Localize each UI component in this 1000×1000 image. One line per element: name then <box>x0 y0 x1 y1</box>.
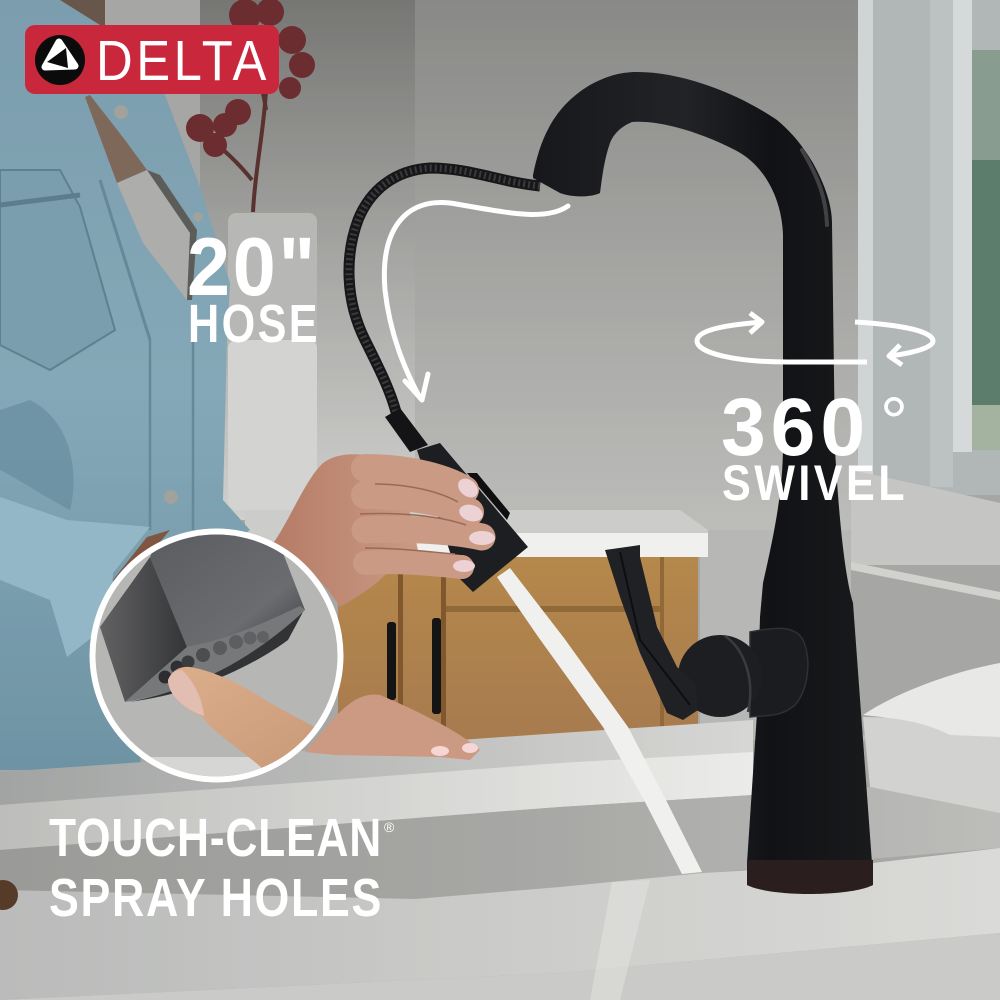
collar shadow <box>60 0 105 25</box>
wood cabinets <box>338 557 698 742</box>
logo: Delta red badge <box>25 25 279 94</box>
person in denim shirt <box>0 0 250 770</box>
label: touch-clean spray holes <box>49 808 395 928</box>
vase and red branches <box>186 0 317 510</box>
faucet: spout and body <box>533 72 873 894</box>
holding hand <box>272 454 495 607</box>
label: touch-clean spray holes: TOUCH-CLEAN <box>49 808 382 868</box>
label: 20 inch hose: HOSE <box>188 294 320 354</box>
back counter <box>245 510 708 557</box>
arrow: swivel rotation <box>697 313 933 365</box>
shirt pocket <box>0 170 115 370</box>
label: 360 degree swivel <box>721 382 908 511</box>
label: touch-clean spray holes: SPRAY HOLES <box>49 868 383 928</box>
main counter and sink <box>0 663 1000 1000</box>
button placket <box>150 340 193 530</box>
inset circle: touch-clean spray holes <box>90 520 350 787</box>
faucet: lever handle <box>605 545 808 720</box>
rolled sleeve <box>0 497 150 657</box>
window frame <box>851 0 1000 735</box>
label: touch-clean spray holes: ® <box>384 819 395 835</box>
label: 360 degree swivel: 360 <box>721 382 870 473</box>
braided hose <box>349 168 540 412</box>
spray head <box>385 408 528 592</box>
inner t-shirt <box>117 170 190 300</box>
arrowhead: hose <box>405 374 428 400</box>
logo mark <box>35 35 85 85</box>
water stream <box>497 568 702 874</box>
label: 20 inch hose <box>187 220 320 354</box>
neck skin <box>85 95 147 183</box>
label: 360 degree swivel: ° <box>880 383 908 461</box>
resting hand <box>305 695 480 760</box>
logo wordmark: DELTA <box>96 29 270 93</box>
label: 20 inch hose: 20" <box>187 220 318 313</box>
label: 360 degree swivel: SWIVEL <box>722 455 908 511</box>
arrow: hose length <box>384 202 568 398</box>
